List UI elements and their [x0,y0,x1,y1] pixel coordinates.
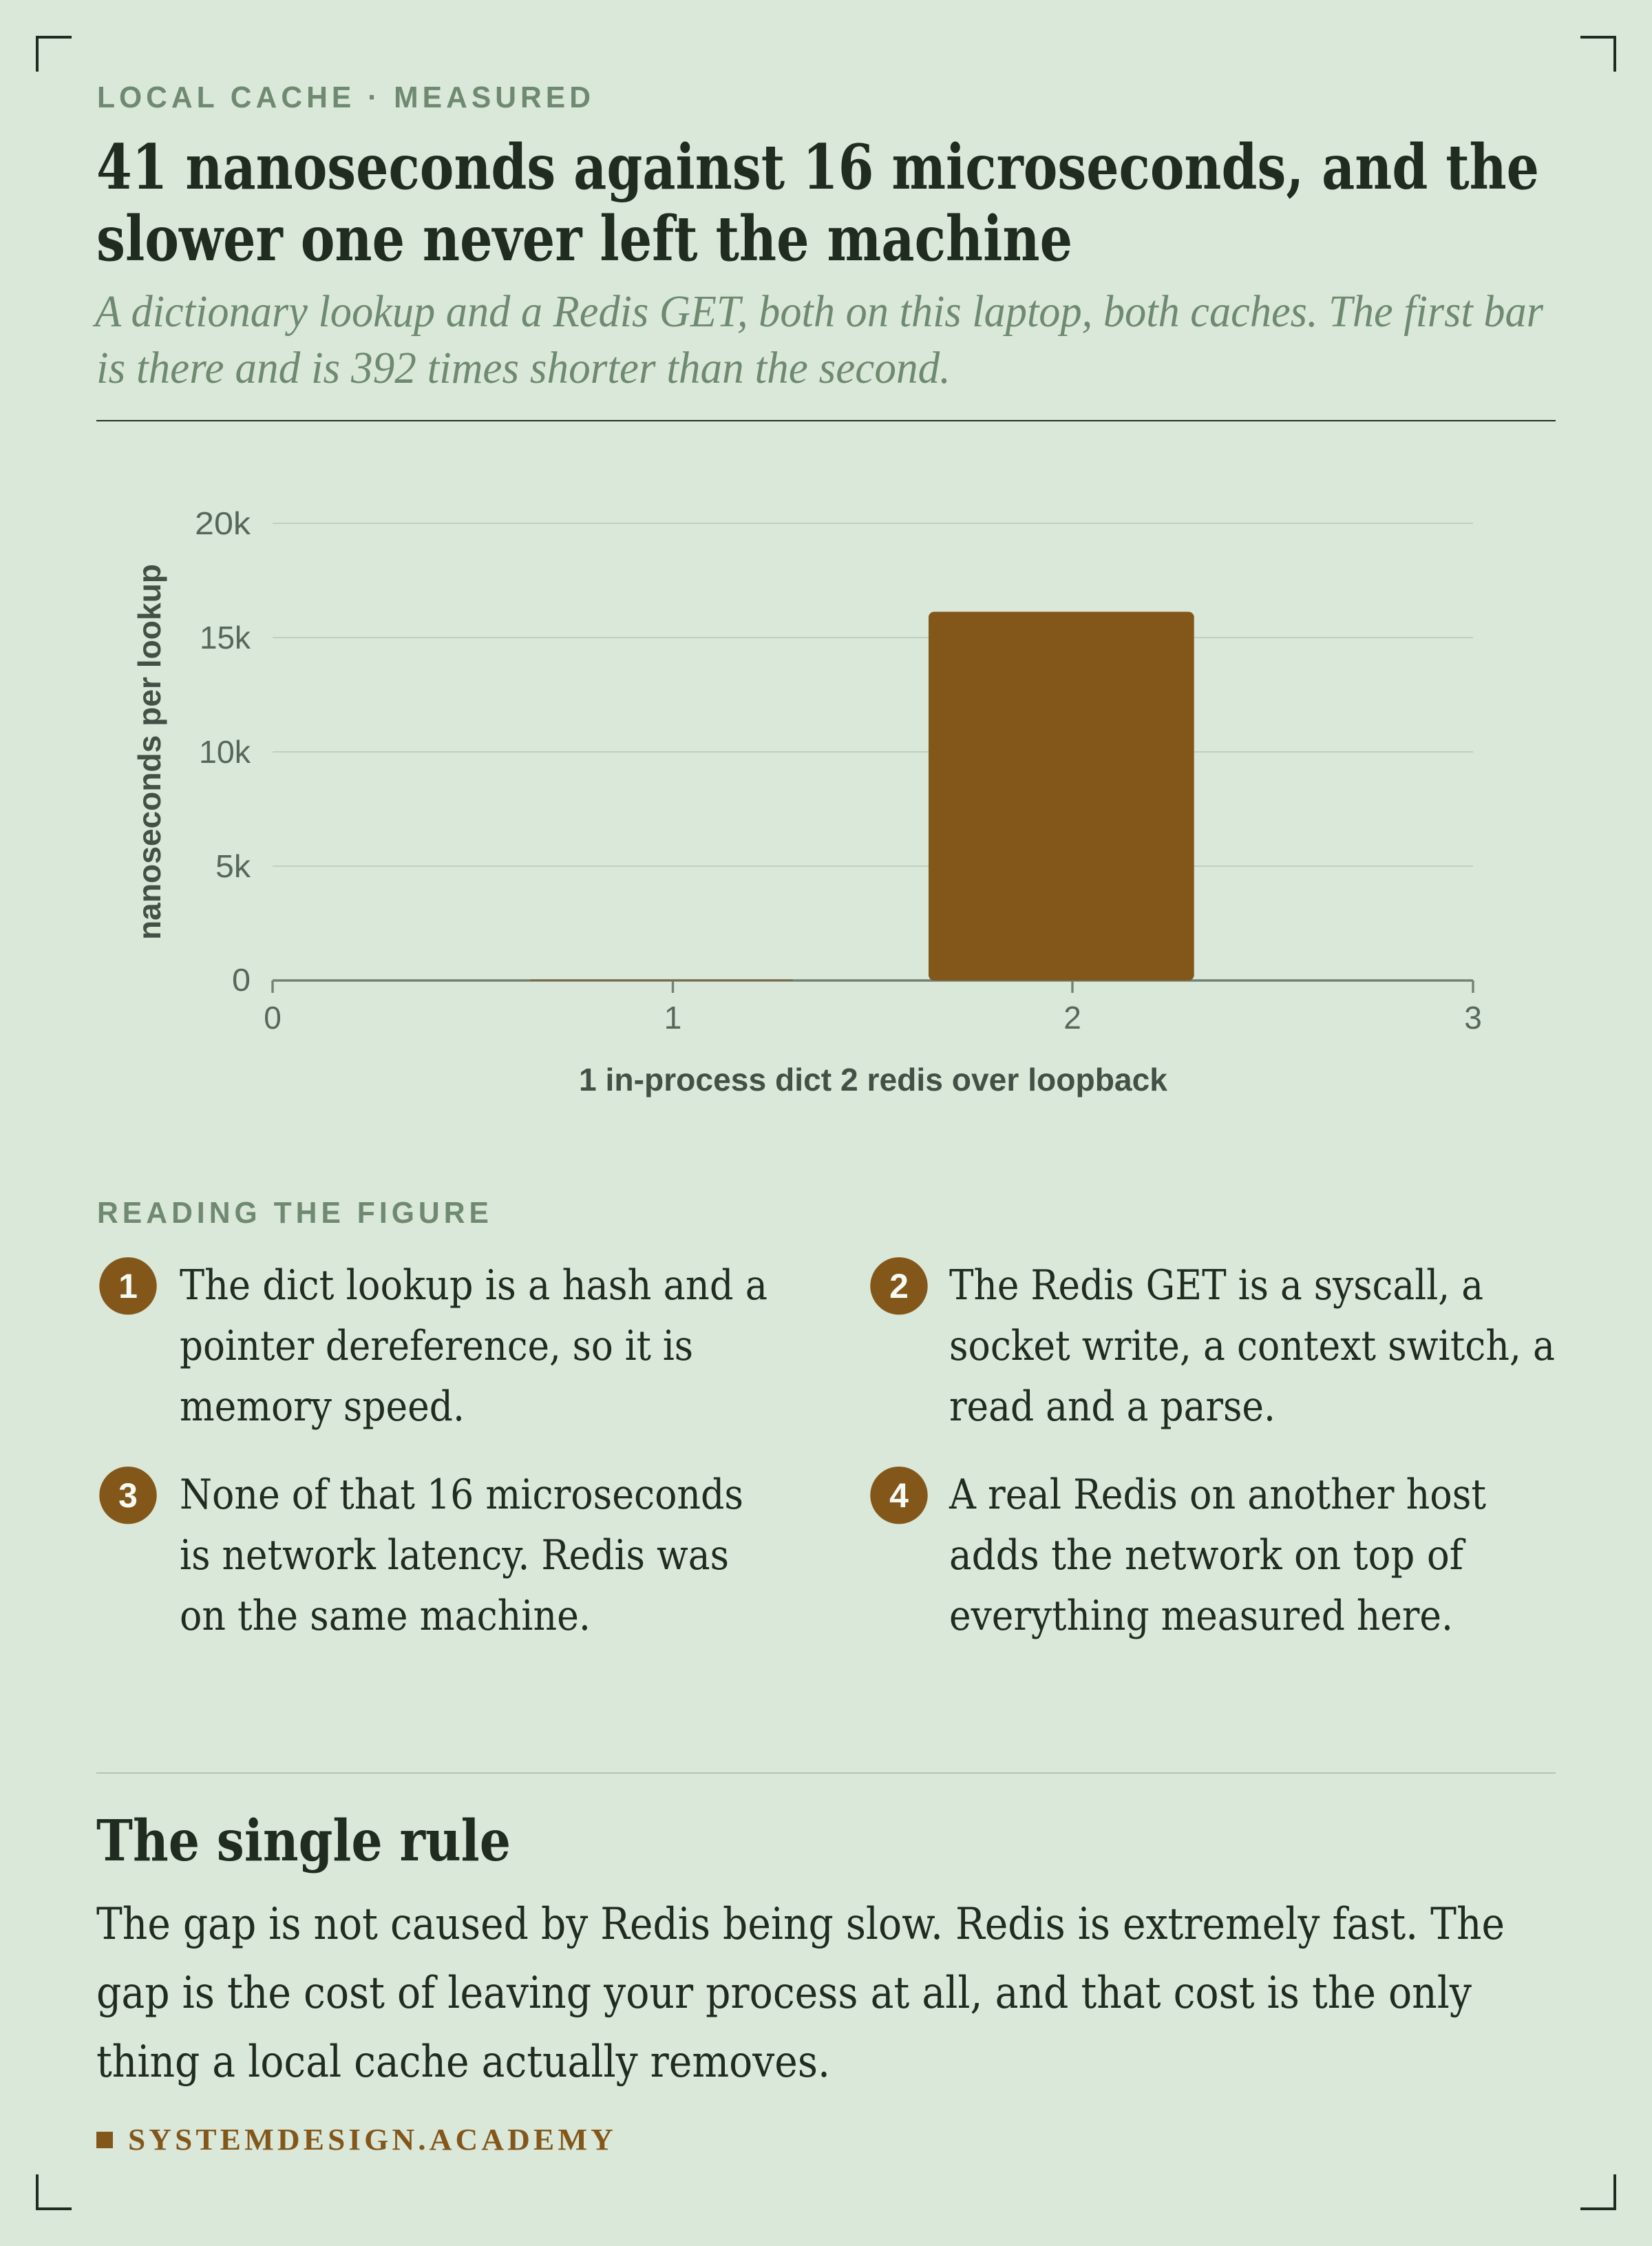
title [96,131,1539,275]
item 2: The Redis GET is a syscall, a [949,1261,1483,1310]
item 1: 1 [118,1267,138,1305]
x axis tick labels: 0 [264,1000,282,1036]
rule body: The gap is not caused by Redis being slow. Redis is extremely fast. The [96,1899,1505,1950]
y axis tick labels: 15k [200,620,251,655]
item 2: socket write, a context switch, a [949,1322,1555,1370]
rule body: thing a local cache actually removes. [96,2037,830,2088]
x axis title: 1 in-process dict 2 redis over loopback [579,1062,1167,1098]
rule body: gap is the cost of leaving your process at all, and that cost is the only [96,1968,1472,2019]
x axis tick labels: 2 [1063,1000,1081,1036]
item 3: None of that 16 microseconds [180,1471,743,1519]
rule body [96,1899,1505,2088]
item 4: adds the network on top of [949,1531,1465,1579]
item 4: everything measured here. [949,1592,1453,1640]
item 1: memory speed. [180,1383,465,1431]
bar: redis over loopback [929,611,1194,980]
item 1: pointer dereference, so it is [180,1322,693,1370]
x axis tick labels: 3 [1464,1000,1482,1036]
footer brand: SYSTEMDESIGN.ACADEMY [128,2123,617,2156]
subtitle: A dictionary lookup and a Redis GET, both on this laptop, both caches. The first bar [92,286,1543,337]
item 3: is network latency. Redis was [180,1531,729,1579]
x axis tick labels [264,1000,1482,1036]
item 4: A real Redis on another host [949,1471,1486,1519]
item 3: on the same machine. [180,1592,591,1640]
subtitle [92,286,1543,393]
item 3 [99,1467,743,1640]
y axis tick labels: 10k [199,734,251,770]
y axis tick labels: 20k [195,505,251,541]
x axis tick labels: 1 [664,1000,681,1036]
item 1 [99,1257,767,1431]
item 2: read and a parse. [949,1383,1275,1431]
x axis [273,980,1473,993]
y axis title: nanoseconds per lookup [131,564,167,940]
rule heading: The single rule [96,1808,511,1874]
section label: READING THE FIGURE [97,1196,493,1230]
item 2: 2 [889,1267,909,1305]
y axis tick labels: 0 [232,962,251,998]
y axis tick labels [195,505,251,998]
item 4 [870,1467,1486,1640]
item 1: The dict lookup is a hash and a [180,1261,767,1310]
subtitle: is there and is 392 times shorter than the second. [96,343,951,393]
eyebrow: LOCAL CACHE · MEASURED [97,81,595,114]
y axis tick labels: 5k [215,848,251,884]
title: slower one never left the machine [96,202,1072,275]
bar chart [131,505,1482,1098]
item 4: 4 [889,1476,909,1515]
item 3: 3 [118,1476,138,1515]
item 2 [870,1257,1555,1431]
